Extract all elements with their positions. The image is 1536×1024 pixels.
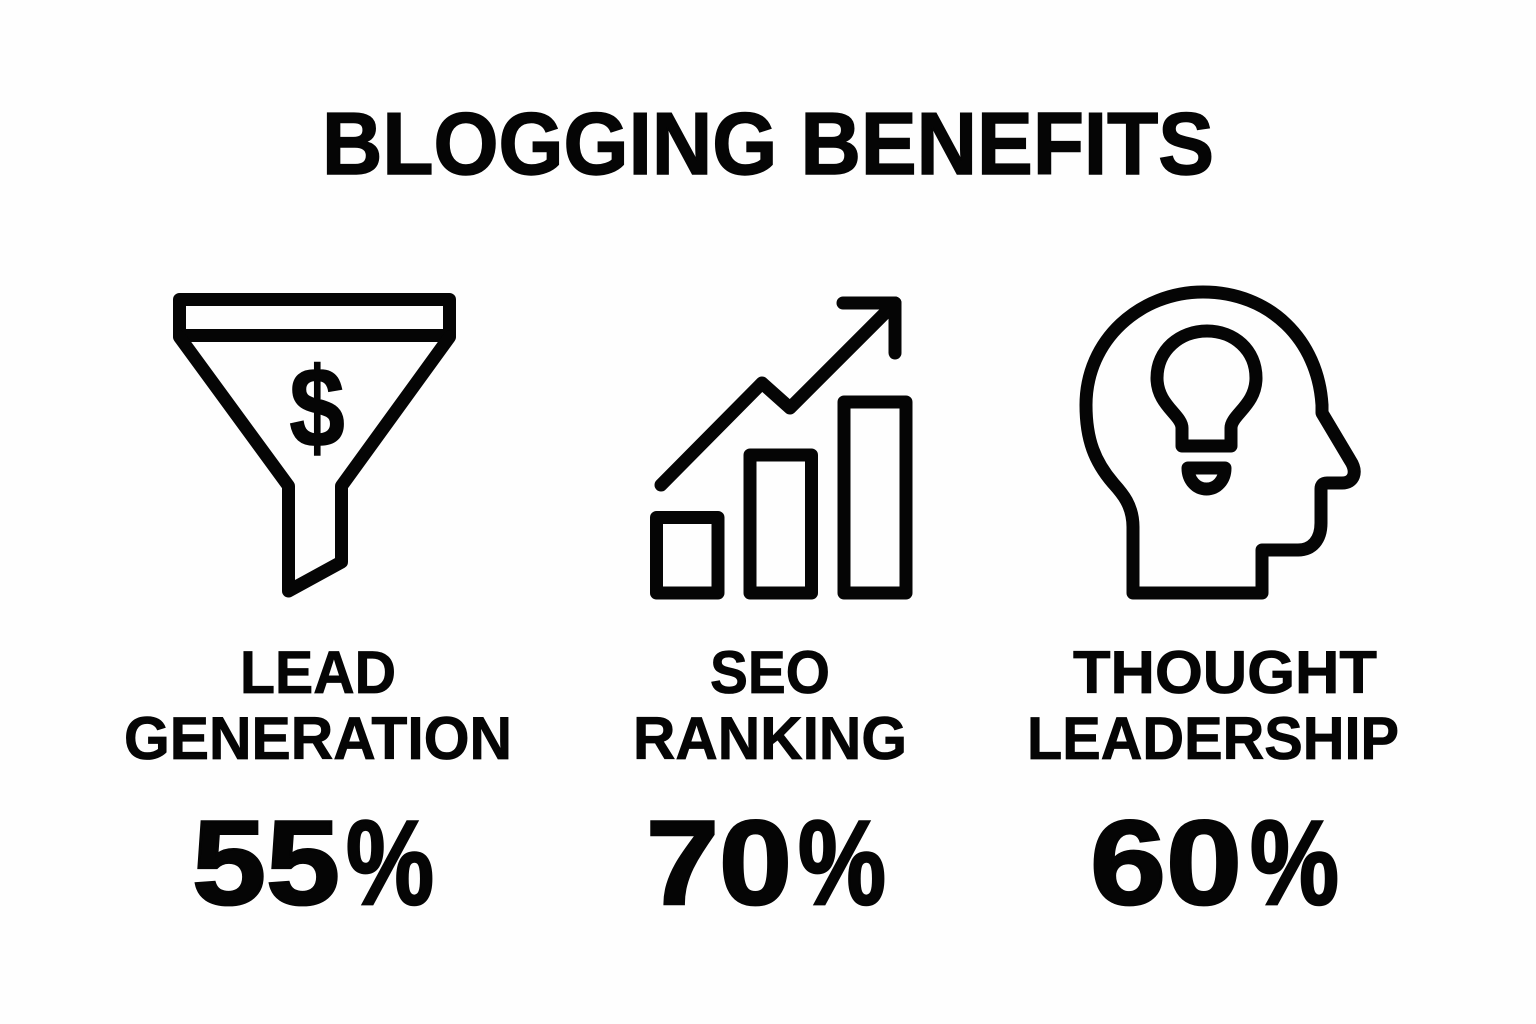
label: seo ranking: RANKING [633,705,907,772]
label: thought leadership: LEADERSHIP [1027,705,1399,772]
label: thought leadership [1027,639,1399,772]
stat: 60%: 60 [1090,796,1242,930]
stat: 70%: % [798,796,886,930]
icon: rising bar chart with arrow [656,303,906,593]
label: thought leadership: THOUGHT [1073,639,1377,706]
icon: funnel with dollar sign: $ [289,345,345,471]
label: lead generation [124,639,512,772]
icon: funnel with dollar sign [180,300,450,591]
stat: 55%: 55 [192,796,340,930]
title: BLOGGING BENEFITS [322,94,1214,193]
stat: 70% [646,796,886,930]
label: seo ranking: SEO [710,639,830,706]
label: lead generation: LEAD [240,639,396,706]
stat: 70%: 70 [646,796,792,930]
stat: 60% [1090,796,1339,930]
stat: 60%: % [1250,796,1339,930]
icon: head with light bulb [1086,292,1354,593]
stat: 55% [192,796,434,930]
label: seo ranking [633,639,907,772]
label: lead generation: GENERATION [124,705,512,772]
stat: 55%: % [346,796,434,930]
